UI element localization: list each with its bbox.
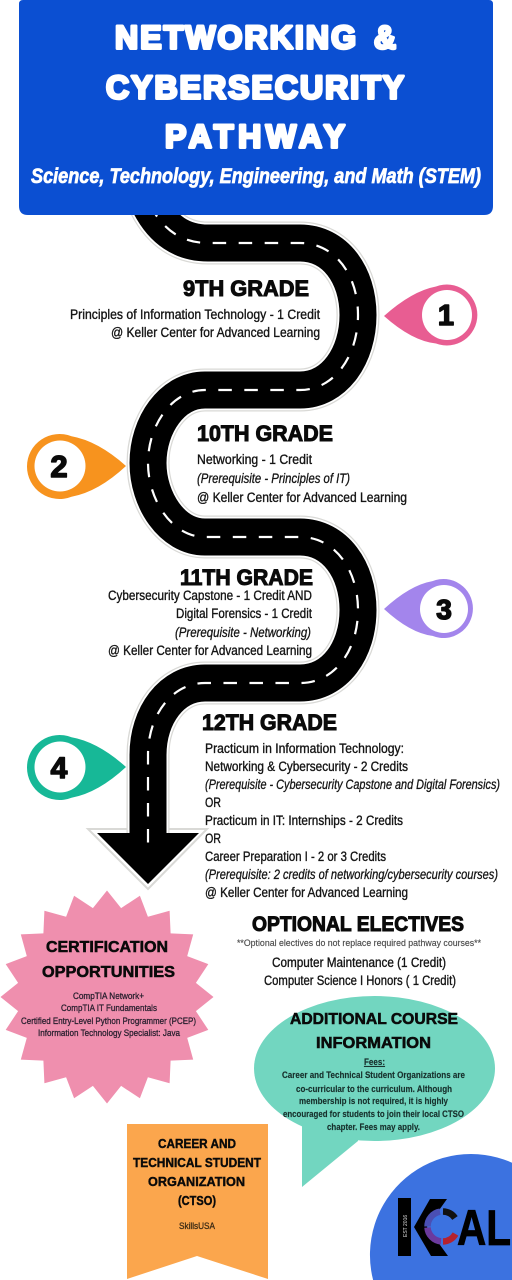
optional electives bbox=[237, 913, 481, 988]
title: & bbox=[374, 20, 396, 56]
certification list: CompTIA Network+ bbox=[73, 991, 144, 1002]
12th grade text block: Practicum in Information Technology: bbox=[205, 741, 404, 756]
10th grade text block: (Prerequisite - Principles of IT) bbox=[197, 471, 350, 486]
optional electives: **Optional electives do not replace required pathway courses** bbox=[237, 938, 481, 949]
bubble body text: Fees: bbox=[364, 1057, 385, 1068]
optional electives: Computer Science I Honors ( 1 Credit) bbox=[264, 973, 456, 988]
logo: KCAL on blue circle: EST 2016 bbox=[403, 1215, 409, 1237]
panel: additional course information speech bubble bbox=[254, 996, 495, 1187]
ribbon heading: ORGANIZATION bbox=[148, 1175, 245, 1189]
ribbon heading: CAREER AND bbox=[158, 1137, 236, 1151]
certification list: Certified Entry-Level Python Programmer (PCEP) bbox=[21, 1016, 196, 1027]
11th grade text block: (Prerequisite - Networking) bbox=[175, 625, 311, 640]
icon: pin 2 bbox=[27, 434, 126, 499]
12th grade text block: 12TH GRADE bbox=[202, 710, 337, 735]
11th grade text block: 11TH GRADE bbox=[180, 565, 313, 590]
icon: pin 3 bbox=[384, 579, 473, 638]
icon: pin 4 bbox=[27, 735, 126, 800]
logo: KCAL on blue circle bbox=[370, 1154, 512, 1280]
11th grade text block: @ Keller Center for Advanced Learning bbox=[108, 643, 312, 658]
title bbox=[106, 20, 404, 154]
ribbon heading: (CTSO) bbox=[178, 1194, 216, 1208]
10th grade text block: 10TH GRADE bbox=[197, 421, 333, 446]
bubble body text: co-curricular to the curriculum. Although bbox=[296, 1084, 452, 1095]
optional electives: Computer Maintenance (1 Credit) bbox=[272, 955, 446, 970]
title: NETWORKING bbox=[115, 20, 356, 56]
11th grade text block: Cybersecurity Capstone - 1 Credit AND bbox=[108, 588, 312, 603]
10th grade text block: @ Keller Center for Advanced Learning bbox=[197, 490, 407, 505]
panel: certification opportunities bbox=[0, 890, 214, 1104]
optional electives: OPTIONAL ELECTIVES bbox=[252, 913, 464, 936]
12th grade text block bbox=[202, 710, 500, 900]
bubble heading: INFORMATION bbox=[316, 1035, 431, 1052]
title panel bbox=[19, 0, 493, 215]
bubble heading bbox=[290, 1011, 458, 1052]
11th grade text block: Digital Forensics - 1 Credit bbox=[176, 606, 312, 621]
12th grade text block: Practicum in IT: Internships - 2 Credits bbox=[205, 813, 403, 828]
certification list: Information Technology Specialist: Java bbox=[38, 1028, 181, 1039]
icon: pin 4: 4 bbox=[51, 752, 68, 785]
bubble body text: encouraged for students to join their local CTSO bbox=[283, 1109, 464, 1120]
10th grade text block: Networking - 1 Credit bbox=[197, 452, 312, 467]
12th grade text block: Career Preparation I - 2 or 3 Credits bbox=[205, 849, 386, 864]
9th grade text block bbox=[70, 276, 320, 340]
ribbon body: SkillsUSA bbox=[179, 1221, 216, 1232]
10th grade text block bbox=[197, 421, 407, 505]
9th grade text block: 9TH GRADE bbox=[183, 276, 309, 301]
bubble heading: ADDITIONAL COURSE bbox=[290, 1011, 458, 1028]
12th grade text block: Networking & Cybersecurity - 2 Credits bbox=[205, 759, 408, 774]
12th grade text block: @ Keller Center for Advanced Learning bbox=[205, 885, 408, 900]
certification heading: CERTIFICATION bbox=[46, 939, 168, 956]
11th grade text block bbox=[108, 565, 313, 658]
certification list bbox=[21, 991, 196, 1039]
9th grade text block: Principles of Information Technology - 1 Credit bbox=[70, 307, 320, 322]
icon: pin 1: 1 bbox=[438, 300, 454, 332]
winding road with arrow bbox=[88, 205, 358, 889]
12th grade text block: OR bbox=[205, 795, 221, 810]
certification heading bbox=[42, 939, 175, 981]
9th grade text block: @ Keller Center for Advanced Learning bbox=[111, 325, 320, 340]
bubble body text: Career and Technical Student Organizations are bbox=[282, 1070, 465, 1081]
title: PATHWAY bbox=[165, 118, 345, 154]
ribbon heading bbox=[133, 1137, 261, 1208]
certification heading: OPPORTUNITIES bbox=[42, 964, 175, 981]
icon: pin 3: 3 bbox=[436, 594, 452, 625]
panel: CTSO ribbon bbox=[127, 1124, 268, 1279]
title: CYBERSECURITY bbox=[106, 70, 404, 106]
bubble body text: chapter. Fees may apply. bbox=[327, 1122, 420, 1133]
bubble body text: membership is not required, it is highly bbox=[299, 1096, 449, 1107]
icon: pin 2: 2 bbox=[50, 449, 68, 484]
bubble body text bbox=[282, 1057, 465, 1133]
12th grade text block: OR bbox=[205, 831, 221, 846]
icon: pin 1 bbox=[384, 284, 477, 345]
ribbon heading: TECHNICAL STUDENT bbox=[133, 1156, 261, 1170]
certification list: CompTIA IT Fundamentals bbox=[61, 1003, 157, 1014]
